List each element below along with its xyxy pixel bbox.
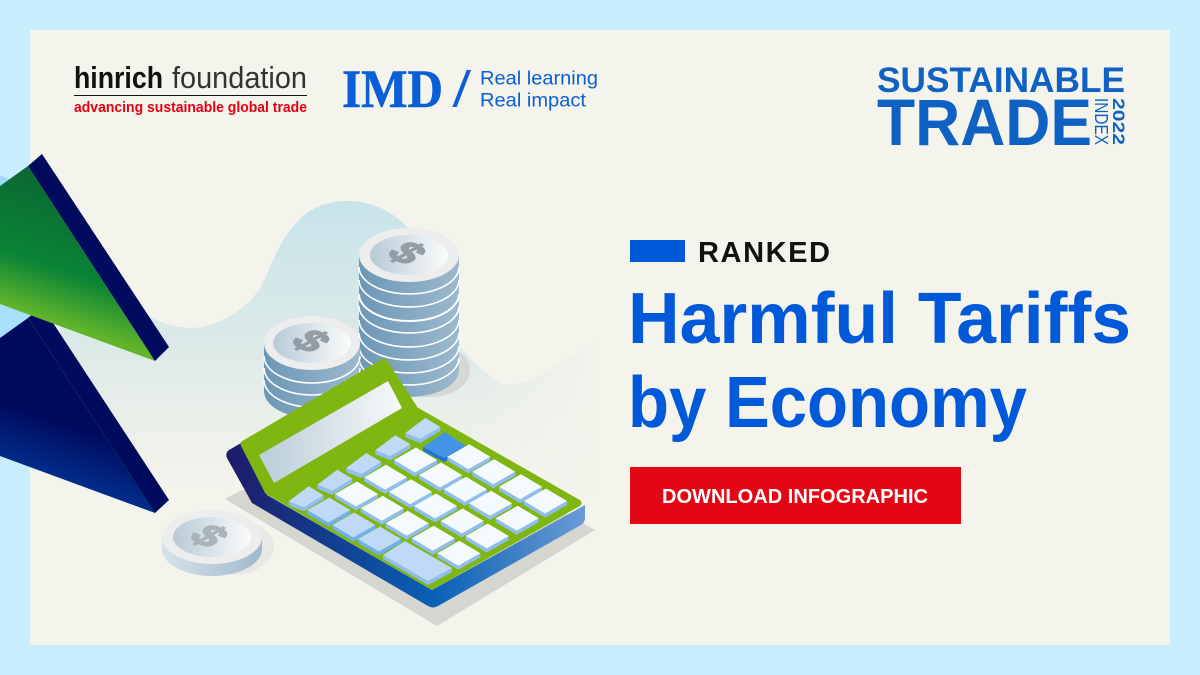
hinrich foundation logo bbox=[74, 60, 307, 116]
navy triangle bbox=[0, 306, 169, 513]
calculator side bbox=[226, 443, 585, 608]
green triangle bbox=[0, 154, 169, 361]
IMD logo bbox=[342, 59, 598, 119]
light blue accents behind triangles bbox=[0, 175, 40, 345]
calculator screen bbox=[259, 381, 402, 483]
small coin stack: $ bbox=[281, 323, 342, 358]
IMD logo: IMD bbox=[342, 59, 443, 119]
keypad bbox=[289, 418, 567, 585]
Sustainable Trade Index 2022 logo: TRADE bbox=[877, 85, 1092, 159]
download button: DOWNLOAD INFOGRAPHIC bbox=[662, 486, 928, 508]
loose coin: $ bbox=[179, 518, 240, 553]
large coin stack: $ bbox=[377, 235, 438, 270]
download button bbox=[630, 467, 961, 524]
IMD logo: Real learning bbox=[480, 68, 598, 90]
calculator shadow bbox=[225, 490, 595, 626]
eyebrow: ranked: RANKED bbox=[698, 237, 830, 269]
hinrich foundation logo: advancing sustainable global trade bbox=[74, 99, 307, 116]
large coin stack bbox=[359, 228, 470, 397]
IMD logo: Real impact bbox=[480, 90, 587, 112]
small coin stack bbox=[264, 316, 360, 418]
Sustainable Trade Index 2022 logo: INDEX bbox=[1091, 98, 1111, 145]
title: Harmful Tariffs bbox=[628, 279, 1131, 359]
calculator body bbox=[244, 362, 578, 586]
title: by Economy bbox=[628, 363, 1027, 443]
loose coin bbox=[162, 510, 274, 576]
title bbox=[628, 279, 1131, 443]
Sustainable Trade Index 2022 logo: SUSTAINABLE bbox=[877, 61, 1125, 100]
blue accent bar bbox=[630, 240, 685, 262]
teal background blob bbox=[60, 201, 540, 426]
calculator illustration bbox=[225, 362, 595, 626]
Sustainable Trade Index 2022 logo bbox=[877, 61, 1128, 159]
Sustainable Trade Index 2022 logo: 2022 bbox=[1109, 98, 1128, 145]
hinrich foundation logo: foundation bbox=[172, 60, 307, 95]
hinrich foundation logo: hinrich bbox=[74, 60, 163, 95]
